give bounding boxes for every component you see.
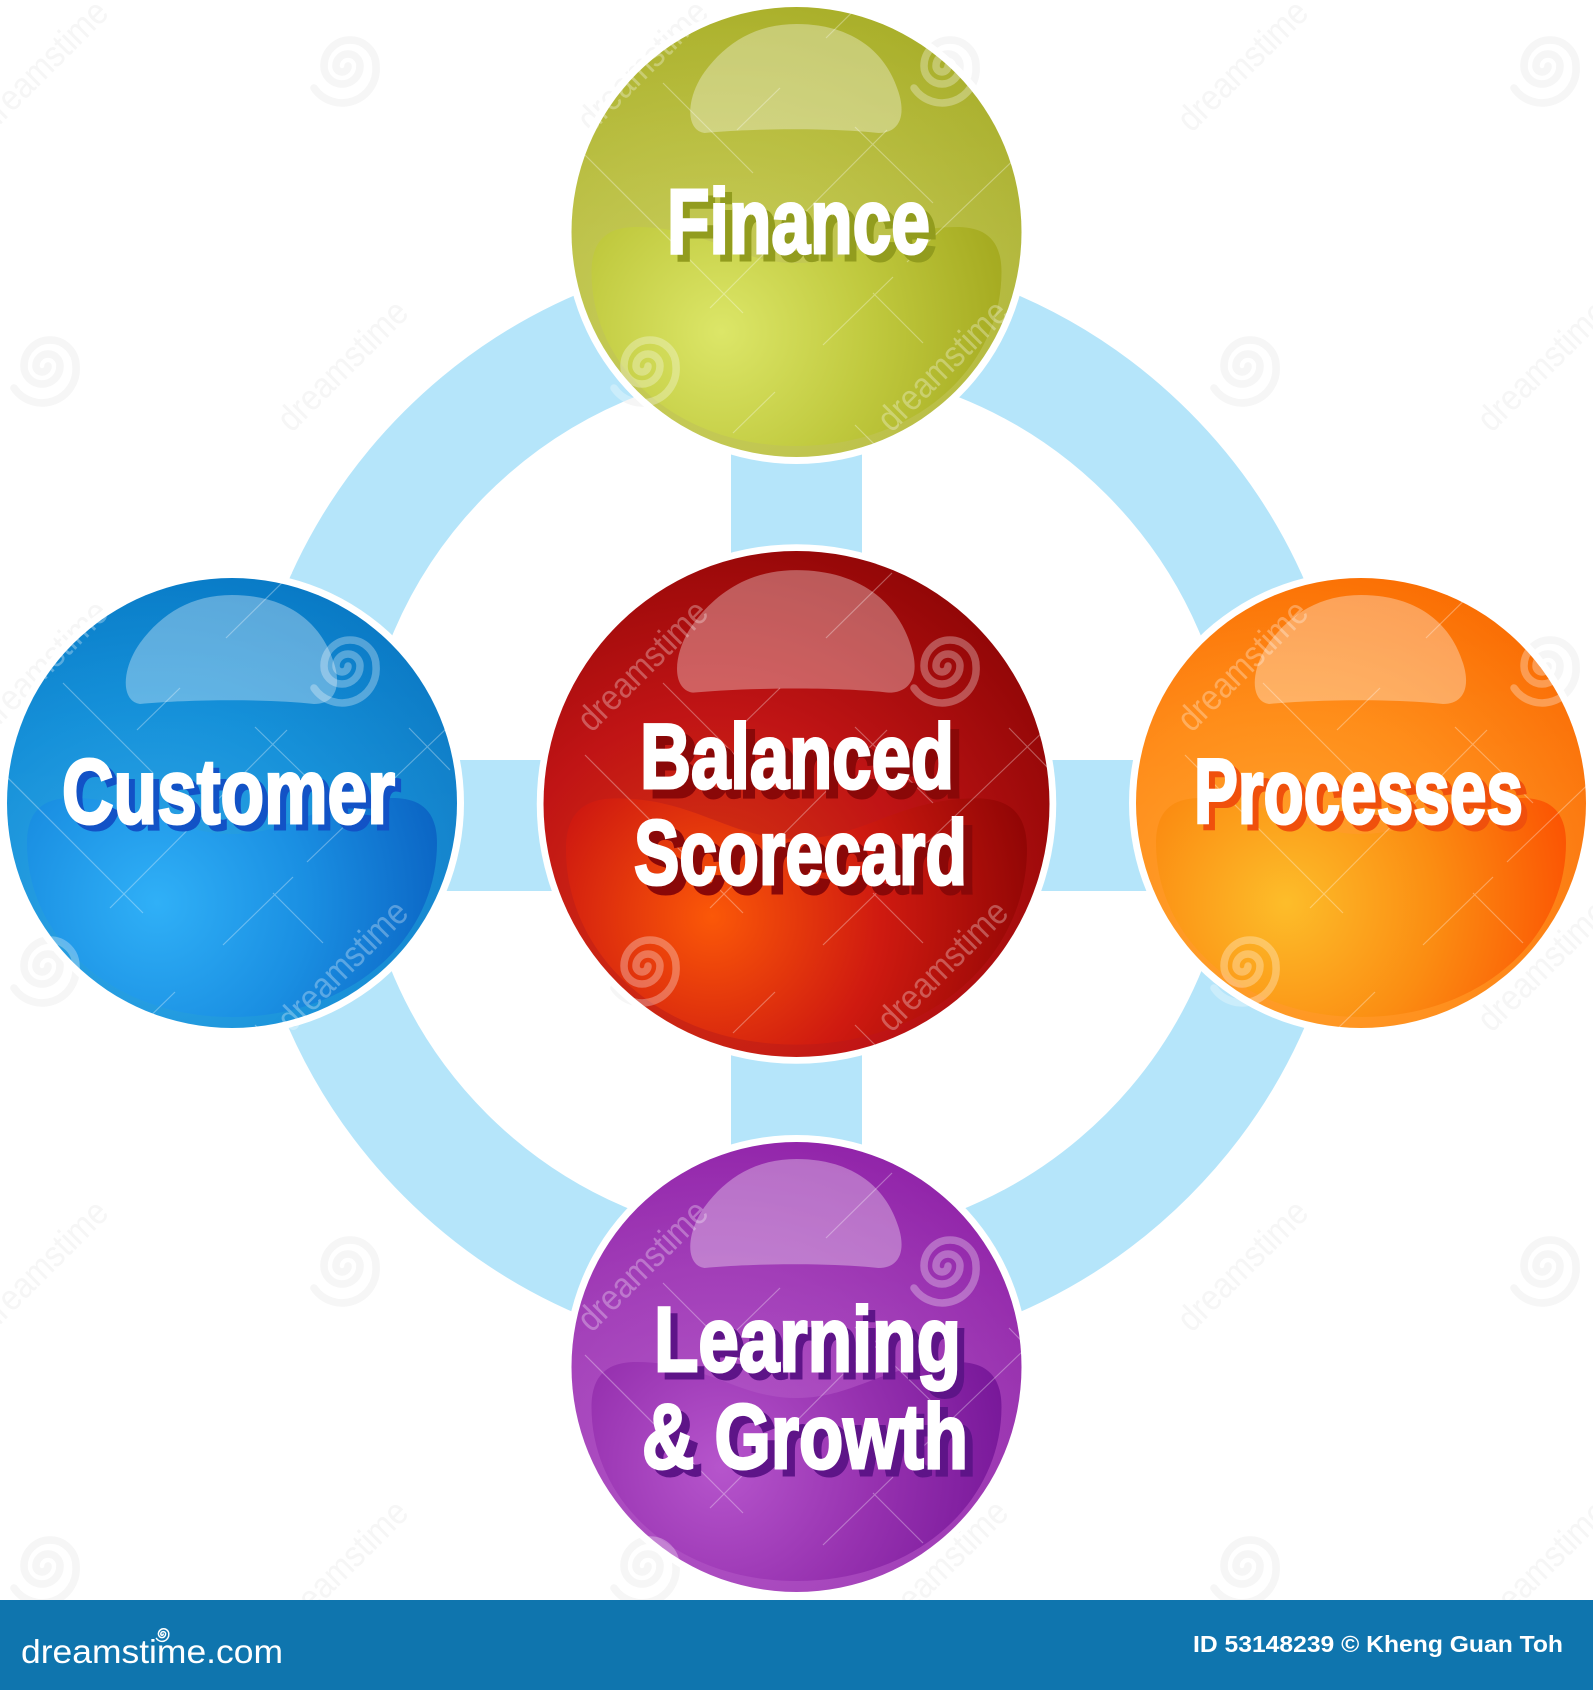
watermark: background layer: dreamstime <box>268 291 416 439</box>
watermark: background layer: dreamstime <box>868 1491 1016 1639</box>
bubble: learning and growth <box>564 1135 1028 1599</box>
connector ring <box>300 308 1293 1300</box>
watermark: background layer: dreamstime <box>868 291 1016 439</box>
connector: horizontal bar <box>300 760 1300 891</box>
footer credit: ID 53148239 © Kheng Guan Toh <box>1193 1631 1563 1657</box>
label: learning and growth: & Growth <box>650 1393 976 1495</box>
watermark: background layer: dreamstime <box>268 891 416 1039</box>
watermark: background layer: dreamstime <box>1168 591 1316 739</box>
label: learning and growth <box>642 1289 976 1495</box>
connector: vertical bar <box>731 300 862 1300</box>
label: balanced scorecard: Scorecard <box>634 802 967 904</box>
label: finance: Finance <box>674 178 937 280</box>
watermark: background layer: dreamstime <box>868 891 1016 1039</box>
watermark: background layer: dreamstime <box>568 1191 716 1339</box>
label: customer: Customer <box>68 747 401 849</box>
label: learning and growth: Learning <box>654 1289 961 1391</box>
label: balanced scorecard: Balanced <box>640 706 954 808</box>
watermark: background layer: dreamstime <box>1168 1191 1316 1339</box>
bubble: balanced scorecard centre <box>537 544 1056 1064</box>
label: balanced scorecard: Balanced <box>649 715 963 817</box>
label: balanced scorecard <box>634 706 976 913</box>
label: finance: Finance <box>667 171 930 273</box>
bubble: processes <box>1129 571 1593 1035</box>
footer bar <box>0 1600 1593 1690</box>
label: learning and growth: & Growth <box>642 1386 968 1488</box>
label: balanced scorecard: Scorecard <box>643 811 976 913</box>
label: learning and growth: Learning <box>661 1296 968 1398</box>
footer logo: dreamstime.com <box>21 1633 283 1670</box>
watermark: background layer: dreamstime <box>268 1491 416 1639</box>
bubble: finance <box>564 0 1028 464</box>
bubble: customer <box>0 571 464 1035</box>
watermark: background layer: dreamstime <box>568 591 716 739</box>
label: customer: Customer <box>62 741 395 843</box>
